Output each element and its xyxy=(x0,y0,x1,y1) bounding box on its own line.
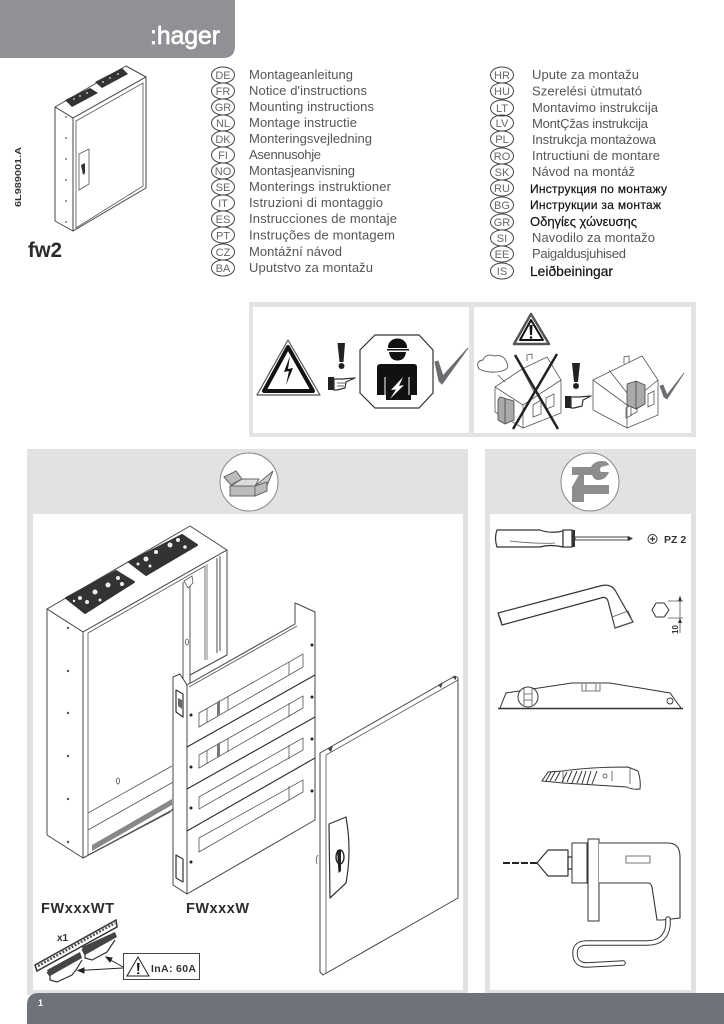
icon: wrench and hammer xyxy=(561,453,619,511)
icon: X cross xyxy=(513,354,558,429)
language EE: EE xyxy=(495,249,509,261)
language IT: IT xyxy=(218,198,228,210)
language SI: SI xyxy=(497,233,507,245)
language EE xyxy=(490,246,626,262)
power cord xyxy=(575,919,668,965)
language HR: Upute za montažu xyxy=(532,67,639,82)
product illustration: closed cabinet xyxy=(55,66,146,231)
icon: hexagon 10 mm dimension xyxy=(652,596,683,634)
language NL xyxy=(212,115,357,131)
language FI xyxy=(212,147,321,163)
panel: qualified electrician xyxy=(253,307,469,433)
language SK: Návod na montáž xyxy=(532,164,635,179)
language RO: Intructiuni de montare xyxy=(532,148,660,163)
language LV: LV xyxy=(496,118,509,130)
document code: 6L989001.A xyxy=(13,147,23,207)
language GR: Mounting instructions xyxy=(249,99,374,114)
language GR: GR xyxy=(494,217,510,229)
arrows to terminals xyxy=(78,957,123,973)
panel: required tools xyxy=(485,449,696,995)
label: PZ 2 xyxy=(648,534,686,546)
language FR: FR xyxy=(216,86,230,98)
icon: pointing hand xyxy=(328,377,355,390)
language LV xyxy=(490,115,649,131)
language DK: Monteringsvejledning xyxy=(249,131,372,146)
language CZ xyxy=(212,244,342,260)
top gland plate right xyxy=(129,535,197,575)
icon: hexagon 10 mm dimension: 10 xyxy=(671,625,680,634)
language DE xyxy=(212,67,353,83)
footer band xyxy=(27,993,724,1024)
icon: utility knife xyxy=(542,767,640,789)
language HR xyxy=(490,67,639,83)
language PL: Instrukcja montażowa xyxy=(532,132,657,147)
language IS: Leiðbeiningar xyxy=(530,263,613,279)
hager logo: :hager xyxy=(150,22,220,50)
illustration: front door xyxy=(316,676,458,975)
language SE: SE xyxy=(216,182,230,194)
page number: 1 xyxy=(38,998,43,1008)
language ES: ES xyxy=(216,214,230,226)
icon: electrician in octagon xyxy=(360,335,433,408)
language FI: FI xyxy=(218,150,228,162)
language NL: Montage instructie xyxy=(249,115,357,130)
language CZ: CZ xyxy=(216,247,231,259)
icon: exclamation mark xyxy=(338,343,345,369)
language GR: Οδηγίες χώνευσης xyxy=(530,214,637,229)
language PT: Instruções de montagem xyxy=(249,228,395,242)
language BG xyxy=(490,197,661,213)
icon: socket wrench xyxy=(498,585,633,628)
language SK xyxy=(490,164,635,180)
language HU xyxy=(490,83,642,99)
icon: open box xyxy=(220,453,278,511)
language HU: Szerelési ùtmutató xyxy=(532,84,642,98)
icon: screwdriver xyxy=(496,530,633,547)
language HU: HU xyxy=(494,86,510,98)
language IT: Istruzioni di montaggio xyxy=(249,195,383,210)
language RU: Инструкция по монтажу xyxy=(530,182,667,196)
language EE: Paigaldusjuhised xyxy=(532,246,626,261)
language LT: Montavimo instrukcija xyxy=(532,100,659,115)
callout: rated current warning xyxy=(78,954,200,980)
language DK: DK xyxy=(215,134,231,146)
language BA: BA xyxy=(216,263,231,275)
language SI: Navodilo za montažo xyxy=(532,230,655,245)
language DE: Montageanleitung xyxy=(249,67,353,82)
language NO: Montasjeanvisning xyxy=(249,163,355,178)
language NL: NL xyxy=(216,118,230,130)
illustration: modular front panel xyxy=(173,603,315,894)
language SE: Monterings instruktioner xyxy=(249,179,392,194)
language list: left column xyxy=(212,67,397,276)
language RO: RO xyxy=(494,151,511,163)
language BG: BG xyxy=(494,200,510,212)
icon: safe house xyxy=(593,356,658,428)
icon: power drill xyxy=(503,839,680,965)
language HR: HR xyxy=(494,70,510,82)
language NO: NO xyxy=(215,166,232,178)
icon: damaged house with cloud xyxy=(478,354,561,428)
panel: safety warnings xyxy=(249,302,696,437)
icon: check mark xyxy=(660,373,684,399)
label: FWxxxWT: FWxxxWT xyxy=(41,901,114,917)
language IS: IS xyxy=(497,266,507,278)
language CZ: Montážní návod xyxy=(249,244,342,259)
header band with logo xyxy=(0,0,235,58)
icon: warning triangle xyxy=(514,314,549,344)
product name: fw2 xyxy=(28,239,62,262)
language DE: DE xyxy=(215,70,231,82)
language BG: Инструкции за монтаж xyxy=(530,198,661,212)
language SK: SK xyxy=(495,167,510,179)
language GR xyxy=(490,214,637,230)
language BA: Uputstvo za montažu xyxy=(249,260,373,275)
illustration: busbar and terminals xyxy=(35,920,117,982)
icon: exclamation mark xyxy=(572,363,580,389)
icon: electric hazard triangle xyxy=(257,340,320,395)
language RU xyxy=(490,180,667,196)
language PT: PT xyxy=(216,230,230,242)
language NO xyxy=(212,163,355,179)
language PL: PL xyxy=(495,134,509,146)
language LT: LT xyxy=(496,103,508,115)
icon: check mark xyxy=(435,348,468,384)
panel: indoor installation only xyxy=(474,307,691,433)
callout: rated current warning: InA: 60A xyxy=(151,963,196,975)
language GR: GR xyxy=(215,102,231,114)
language LV: MontÇžas instrukcija xyxy=(532,116,649,131)
language ES: Instrucciones de montaje xyxy=(249,211,397,226)
illustration: open cabinet enclosure xyxy=(47,526,227,858)
language RU: RU xyxy=(494,183,510,195)
quantity label: x1 xyxy=(57,933,69,944)
icon: spirit level xyxy=(498,683,683,708)
language list: right column xyxy=(490,67,667,279)
language IS xyxy=(490,263,613,279)
language PL xyxy=(490,131,657,147)
icon: pointing hand xyxy=(565,396,591,408)
language FI: Asennusohje xyxy=(249,147,321,162)
language FR: Notice d'instructions xyxy=(249,83,368,98)
top gland plate left xyxy=(66,571,134,613)
label: PZ 2: PZ 2 xyxy=(664,534,686,546)
label: FWxxxW: FWxxxW xyxy=(186,901,249,917)
panel: package contents xyxy=(27,449,468,995)
